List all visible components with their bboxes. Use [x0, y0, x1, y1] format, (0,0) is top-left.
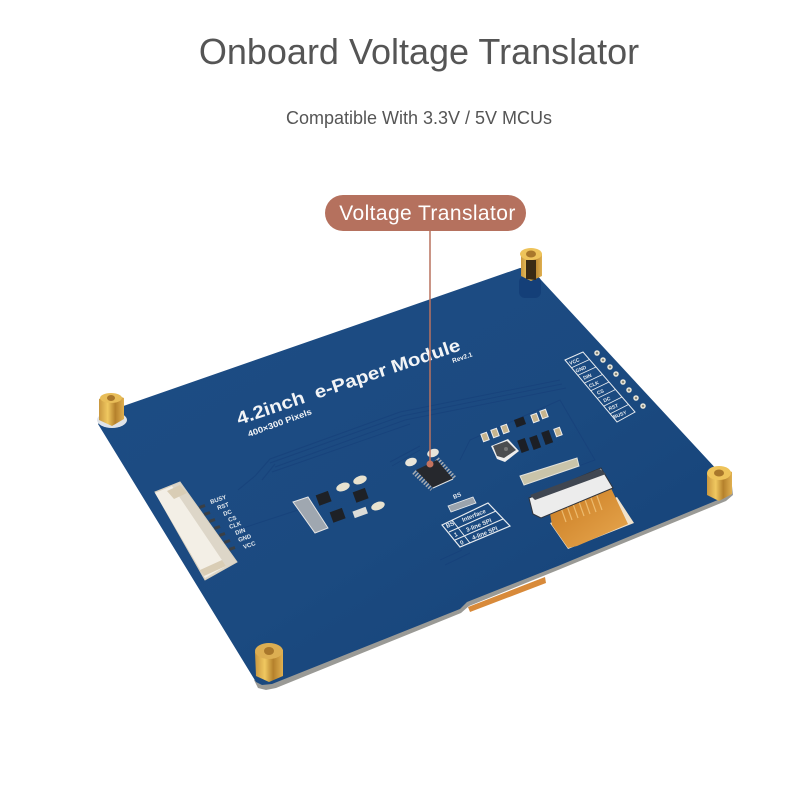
title: Onboard Voltage Translator — [199, 31, 639, 72]
BS interface table: 0 — [460, 540, 465, 547]
header pin holes — [595, 351, 645, 408]
board text: Rev2.1 — [451, 351, 474, 365]
IC voltage translator chip — [404, 447, 455, 489]
pin labels left: DC — [223, 509, 233, 518]
board edge — [254, 470, 733, 690]
right header labels: CS — [596, 388, 606, 397]
BS interface table: 1 — [454, 532, 459, 539]
BS interface table: BS — [453, 492, 462, 501]
FPC connector — [529, 468, 613, 518]
right header labels: CLK — [588, 380, 600, 390]
white JST connector — [155, 482, 237, 580]
BS interface table: 3-line SPI — [466, 518, 493, 534]
flex cable — [549, 486, 628, 548]
right header labels: DC — [603, 396, 612, 404]
components: upper right — [481, 409, 562, 462]
components: left group — [293, 474, 386, 533]
inductor — [491, 439, 519, 462]
FPC cutout — [550, 497, 634, 549]
transistors — [517, 438, 529, 453]
BS interface table: BS — [446, 521, 455, 530]
board text: 400×300 Pixels — [246, 407, 313, 439]
brass standoff: left — [97, 393, 127, 428]
right header labels: RST — [608, 403, 619, 412]
PCB traces — [238, 380, 595, 565]
pin labels left: RST — [217, 502, 230, 512]
e-paper module board — [97, 248, 733, 690]
callout label: Voltage Translator — [339, 202, 516, 225]
callout leader line — [429, 230, 431, 465]
right header labels: VCC — [569, 357, 581, 367]
callout pill — [325, 195, 526, 231]
right header labels — [565, 351, 645, 422]
right header labels: DIN — [583, 373, 593, 382]
BS interface table — [442, 492, 510, 547]
bottom flex strip — [468, 577, 546, 612]
right header labels: GND — [575, 365, 588, 375]
BS interface table: Interface — [462, 509, 488, 524]
BS interface table: 4-line SPI — [472, 526, 499, 542]
brass standoff: top — [519, 248, 542, 298]
right header labels: BUSY — [613, 410, 628, 421]
board text: 4.2inch e-Paper Module — [234, 336, 463, 429]
pin labels left: GND — [238, 534, 253, 544]
pin labels left: VCC — [243, 541, 257, 551]
brass standoff: bottom — [255, 643, 283, 682]
pin labels left: BUSY — [210, 495, 227, 506]
blue PCB — [98, 268, 732, 685]
pin labels left: CS — [228, 516, 238, 524]
pin labels left — [210, 495, 257, 551]
subtitle: Compatible With 3.3V / 5V MCUs — [286, 108, 552, 128]
pad row — [520, 458, 579, 485]
small parts — [481, 409, 562, 442]
pin labels left: CLK — [229, 521, 243, 531]
brass standoff: right — [707, 466, 732, 501]
BS solder pads — [448, 497, 476, 512]
pin labels left: DIN — [235, 528, 246, 537]
callout dot — [426, 460, 434, 468]
callout: voltage translator — [325, 195, 526, 468]
